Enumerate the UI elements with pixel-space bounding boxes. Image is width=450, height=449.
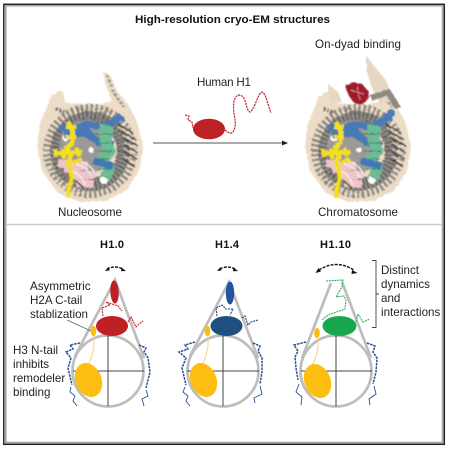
arrow: dynamics (316, 264, 358, 274)
nucleosome schematic (300, 282, 372, 406)
H3 N-tails (179, 342, 262, 406)
panel: H1.0 model (13, 239, 150, 406)
callout: H2A C-tail: H2A C-tail (30, 294, 82, 307)
panel: H1.4 model (179, 239, 262, 406)
nucleosome schematic (72, 280, 144, 406)
callout: distinct dynamics and interactions: and (381, 292, 400, 305)
callout: distinct dynamics and interactions (381, 264, 440, 319)
chromatosome structure (305, 55, 411, 202)
arrow: binding (153, 140, 288, 146)
arrow: dynamics (217, 267, 238, 271)
callout: H3 N-tail (13, 344, 65, 399)
H1 globular domain (210, 282, 258, 336)
title: High-resolution cryo-EM structures (135, 14, 330, 26)
label: nucleosome: Nucleosome (58, 206, 122, 219)
arrow: dynamics (105, 267, 126, 271)
icon: human H1 protein (185, 92, 271, 139)
label: on-dyad binding: On-dyad binding (315, 38, 401, 51)
callout: H3 N-tail: H3 N-tail (13, 344, 58, 357)
nucleosome structure (37, 70, 143, 202)
heading: H1.10: H1.10 (320, 239, 351, 251)
H3 N-tails (66, 343, 150, 406)
H2A C-tail (299, 328, 336, 402)
label: chromatosome: Chromatosome (318, 206, 398, 219)
label: human H1: Human H1 (197, 76, 251, 89)
callout: H2A C-tail: stablization (30, 308, 88, 321)
callout: H2A C-tail: Asymmetric (30, 280, 91, 293)
H2A C-tail (70, 326, 107, 401)
bracket: distinct dynamics (372, 260, 379, 328)
callout: distinct dynamics and interactions: dynamics (381, 278, 430, 291)
callout: H2A C-tail (30, 280, 91, 331)
panel: cryo-EM structures (37, 38, 411, 219)
heading: H1.0: H1.0 (100, 239, 124, 251)
callout: H3 N-tail: inhibits (13, 358, 49, 371)
callout: H3 N-tail: remodeler (13, 372, 65, 385)
H1 globular domain (96, 280, 143, 336)
H3 N-tails (294, 342, 377, 405)
panel: H1.10 model (294, 239, 440, 406)
callout: distinct dynamics and interactions: Distinct (381, 264, 420, 277)
H1 globular domain (322, 280, 370, 336)
heading: H1.4: H1.4 (215, 239, 240, 251)
callout: H3 N-tail: binding (13, 386, 50, 399)
nucleosome schematic (187, 282, 259, 406)
H2A C-tail (185, 326, 222, 401)
callout: distinct dynamics and interactions: interactions (381, 306, 440, 319)
